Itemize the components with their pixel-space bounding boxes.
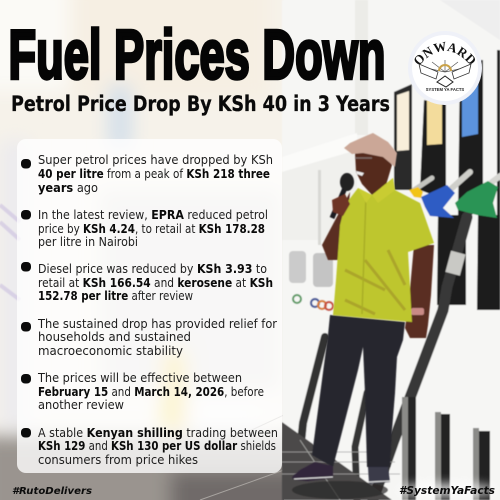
neck and face xyxy=(355,152,392,195)
nozzle hoses xyxy=(300,172,500,500)
left arm xyxy=(322,192,350,260)
bullet 3 xyxy=(21,261,273,303)
right arm and hand xyxy=(405,245,434,338)
hashtag: RutoDelivers: #RutoDelivers xyxy=(12,486,92,497)
bullet 5: February 15 and March 14, 2026, before xyxy=(38,384,264,399)
lower pump slots xyxy=(402,397,490,500)
bullet 4: macroeconomic stability xyxy=(38,343,184,358)
logo: Onward System Ya Facts xyxy=(412,35,482,105)
bullet 3: 152.78 per litre after review xyxy=(38,288,193,303)
logo: Onward System Ya Facts: ONWARD xyxy=(414,42,476,64)
logo: Onward System Ya Facts: SYSTEM YA FACTS xyxy=(426,87,464,92)
subtitle: Petrol Price Drop By KSh 40 in 3 Years xyxy=(11,92,390,116)
bullet 4 xyxy=(21,316,278,358)
bullet 1 xyxy=(21,152,273,195)
bullet 6: consumers from price hikes xyxy=(38,452,198,467)
recycling marks xyxy=(293,295,333,310)
bullet 2 xyxy=(21,207,268,249)
content card xyxy=(17,139,282,473)
microphone xyxy=(332,173,354,218)
fuel station and pumps xyxy=(282,0,500,500)
shoes xyxy=(292,462,390,484)
bullet 3: Diesel price was reduced by KSh 3.93 to xyxy=(38,261,267,276)
bullet 1: 40 per litre from a peak of KSh 218 three xyxy=(38,166,270,181)
bullet 5 xyxy=(21,370,264,412)
fuel nozzles: yellow, blue, green xyxy=(409,181,498,218)
bullet 5: another review xyxy=(38,397,124,412)
bullet 3: retail at KSh 166.54 and kerosene at KSh xyxy=(38,275,273,290)
rounded service windows xyxy=(289,251,333,287)
blurred background: station forecourt xyxy=(0,0,310,500)
bullet 2: In the latest review, EPRA reduced petrol xyxy=(38,207,268,222)
bullet 2: price by KSh 4.24, to retail at KSh 178.28 xyxy=(38,221,265,236)
bullet 5: The prices will be effective between xyxy=(37,370,242,385)
bullet 6: KSh 129 and KSh 130 per US dollar shields xyxy=(38,438,276,453)
bullet 1: Super petrol prices have dropped by KSh xyxy=(38,152,273,167)
cap xyxy=(344,133,397,167)
yellow-green shirt xyxy=(333,178,434,322)
presenter with microphone xyxy=(292,133,434,484)
bullet 1: years ago xyxy=(38,180,98,195)
bullet 6 xyxy=(21,425,278,467)
bullet 6: A stable Kenyan shilling trading between xyxy=(38,425,278,440)
bullet 2: per litre in Nairobi xyxy=(38,234,138,249)
hand xyxy=(332,194,350,216)
bullet 4: The sustained drop has provided relief for xyxy=(37,316,278,331)
trousers xyxy=(312,315,405,467)
hashtag: SystemYaFacts: #SystemYaFacts xyxy=(399,484,495,497)
bullet 4: households and sustained xyxy=(38,329,191,344)
